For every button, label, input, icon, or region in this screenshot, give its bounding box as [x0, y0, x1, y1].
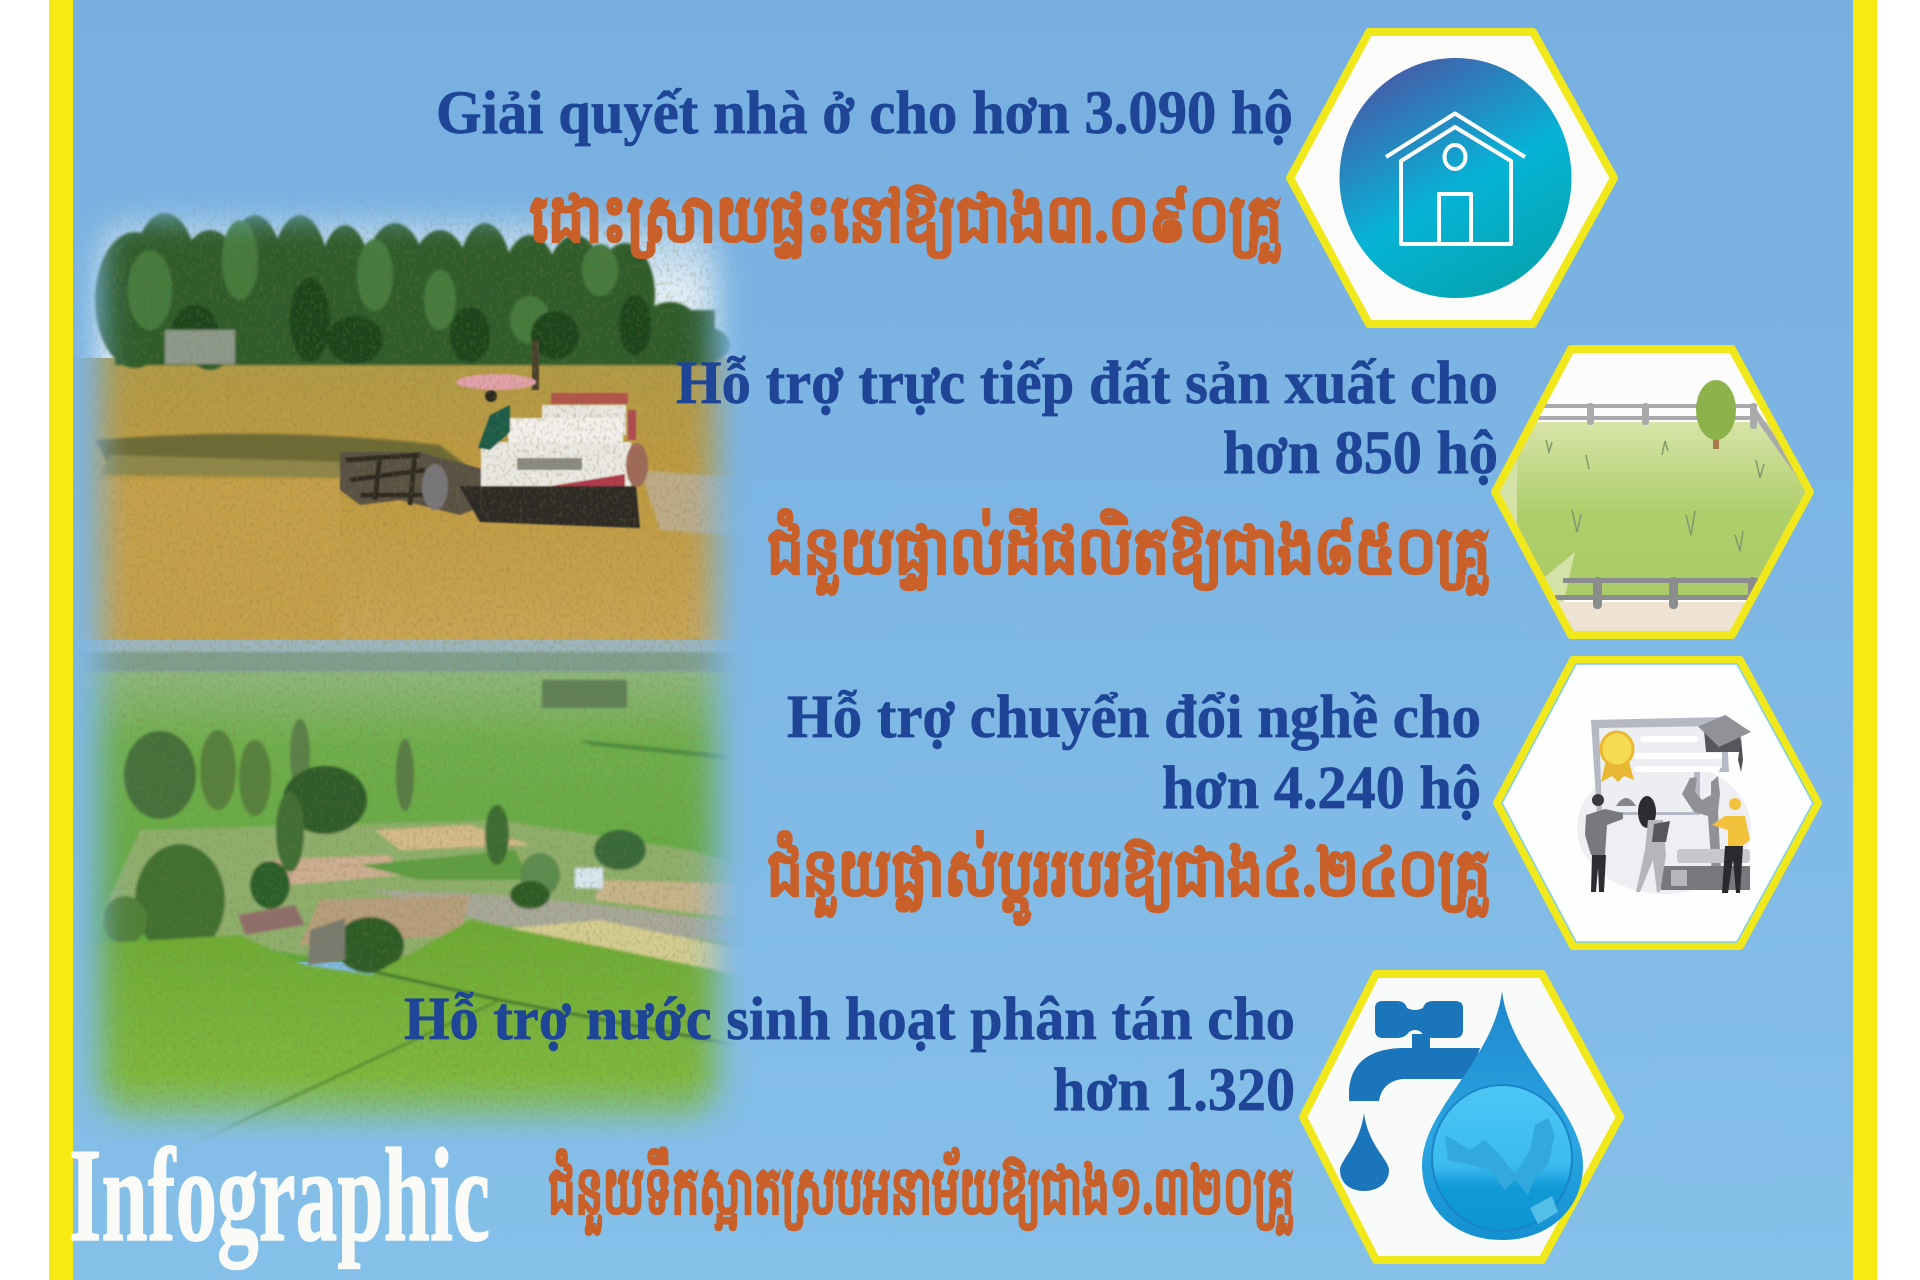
person: woman with clipboard [1636, 796, 1670, 892]
person: chef [1585, 794, 1636, 892]
row 1 heading: Giải quyết nhà ở cho hơn 3.090 hộ [436, 80, 1293, 147]
title: Infographic: Infographic [69, 1121, 490, 1270]
photo: rice harvest [75, 205, 740, 640]
icon: farmland hexagon [1490, 345, 1820, 645]
row 1 Khmer text: ដោះស្រាយផ្ទះនៅឱ្យជាង៣.០៩០គ្រួ [530, 183, 1282, 263]
large water drop [1422, 991, 1583, 1240]
icon: vocational training hexagon [1497, 660, 1818, 946]
globe [1432, 1085, 1572, 1231]
left yellow bar [49, 0, 73, 1280]
person: worker [1712, 798, 1750, 893]
row 4 heading second line: hơn 1.320 [1053, 1057, 1295, 1124]
row 4 Khmer text: ជំនួយទឹកស្អាតស្របអនាម័យឱ្យជាង១.៣២០គ្រួ [548, 1147, 1294, 1235]
row 2 Khmer text: ជំនួយផ្ទាល់ដីផលិតឱ្យជាង៨៥០គ្រួ [767, 509, 1490, 595]
row 3 Khmer text: ជំនួយផ្លាស់ប្តូររបរឱ្យជាង៤.២៤០គ្រួ [767, 831, 1490, 926]
row 3 heading: Hỗ trợ chuyển đổi nghề cho [787, 684, 1481, 751]
wrench [1682, 776, 1722, 890]
photo collage: rice harvest and green fields [74, 200, 740, 1144]
row 2 heading: Hỗ trợ trực tiếp đất sản xuất cho [676, 350, 1498, 417]
tap [1340, 1001, 1480, 1191]
harvester [340, 340, 648, 528]
row 4 heading: Hỗ trợ nước sinh hoạt phân tán cho [404, 986, 1295, 1053]
row 3 heading second line: hơn 4.240 hộ [1162, 755, 1481, 822]
row 2 heading second line: hơn 850 hộ [1223, 420, 1498, 487]
icon: house hexagon [1290, 32, 1614, 324]
certificate badge [1601, 732, 1634, 782]
books [1661, 849, 1750, 890]
graduation cap [1698, 715, 1751, 772]
photo: green fields [73, 640, 803, 1150]
right yellow bar [1853, 0, 1877, 1280]
icon: water tap hexagon [1303, 974, 1620, 1260]
photo texture [85, 198, 730, 1125]
